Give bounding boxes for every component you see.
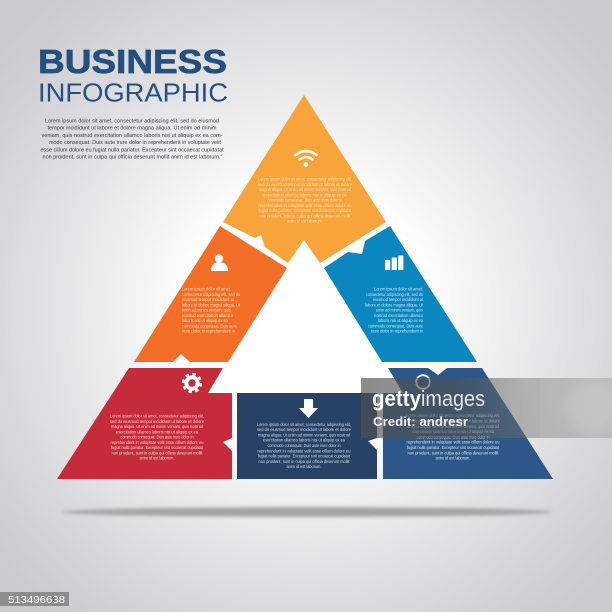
red panel text bbox=[110, 414, 205, 460]
right panel text: eiusmod tempor incididunt ut bbox=[373, 297, 424, 302]
intro text block: non proident, sunt in culpa qui officia deserunt mollit anim id est laborum." bbox=[42, 154, 223, 160]
navy panel text: non proident, sunt in culpa qui officia deserunt mollit bbox=[258, 459, 350, 464]
watermark: getty images credit bbox=[372, 386, 485, 429]
right blue panel text: commodo consequat. Duis aute irure dolor in bbox=[416, 434, 490, 439]
red panel text: sed do eiusmod tempor incididunt ut labore et dolore bbox=[110, 419, 205, 424]
red panel text: Lorem ipsum dolor sit amet, consectetur adipiscing elit, bbox=[110, 414, 204, 418]
panel: bottom-middle navy segment bbox=[237, 393, 377, 479]
red panel text: fugiat nulla pariatur. Excepteur sint occaecat cupidatat bbox=[111, 445, 204, 450]
icon: down arrow bbox=[299, 399, 318, 418]
red panel text: commodo consequat. Duis aute irure dolor in bbox=[120, 434, 194, 440]
left panel text: commodo consequat. Duis aute bbox=[182, 323, 238, 328]
left panel text: eiusmod tempor incididunt ut bbox=[182, 297, 235, 302]
panel: bottom-right blue segment bbox=[383, 368, 553, 479]
right blue panel text: reprehenderit in voluptate velit esse cillum dolore eu bbox=[406, 440, 500, 445]
orange panel text: magna aliqua. Ut enim ad minim veniam, quis nostrud bbox=[259, 187, 352, 192]
title: Business Infographic: BUSINESS bbox=[38, 44, 227, 81]
icon: bar chart bbox=[385, 256, 403, 270]
right panel text: laboris nisi ut aliquip ex ea bbox=[378, 318, 424, 323]
navy panel text: Lorem ipsum dolor sit amet, consectetur adipiscing elit, bbox=[257, 422, 351, 427]
panel: bottom-left red segment bbox=[57, 368, 232, 479]
right blue panel text: anim id est laborum. bbox=[436, 456, 470, 461]
image id tag bbox=[0, 592, 69, 606]
right blue panel text: non proident, sunt in culpa qui officia deserunt mollit bbox=[408, 450, 499, 455]
navy panel text: commodo consequat. Duis aute irure dolor in bbox=[268, 443, 341, 448]
icon: magnifier ring bbox=[416, 375, 430, 389]
icon: gear bbox=[183, 374, 201, 392]
right panel text: nostrud exercitation ullamco bbox=[374, 313, 424, 318]
right panel text: irure dolor in reprehenderit in bbox=[371, 328, 424, 334]
watermark: getty images credit: images bbox=[421, 386, 485, 411]
floor shadow bbox=[62, 507, 552, 517]
orange panel text: commodo consequat. Duis aute irure dolor in bbox=[268, 198, 343, 202]
left panel text: consectetur adipiscing elit, sed do bbox=[182, 292, 241, 297]
navy panel text: anim id est laborum. bbox=[286, 464, 322, 469]
image id tag: 513496638 bbox=[8, 594, 65, 606]
orange panel text: anim id est laborum. bbox=[287, 218, 323, 224]
orange panel text: fugiat nulla pariatur. Excepteur sint occaecat cupidatat bbox=[258, 208, 352, 213]
icon: wifi bbox=[296, 151, 316, 166]
orange panel text bbox=[258, 176, 353, 224]
orange panel text: reprehenderit in voluptate velit esse cillum dolore eu bbox=[258, 203, 352, 208]
right blue panel text: Lorem ipsum dolor sit amet, consectetur adipiscing elit, bbox=[406, 413, 500, 418]
icon: person bbox=[211, 254, 228, 271]
orange panel text: non proident, sunt in culpa qui officia deserunt mollit bbox=[260, 213, 351, 218]
orange panel text: sed do eiusmod tempor incididunt ut labore et dolore bbox=[258, 182, 353, 187]
left panel text: labore et dolore magna aliqua. Ut bbox=[182, 302, 241, 307]
left panel text: Lorem ipsum dolor sit amet, bbox=[182, 286, 231, 292]
left panel text: enim ad minim veniam, quis bbox=[182, 308, 231, 312]
intro text block bbox=[40, 118, 224, 160]
right blue panel text: magna aliqua. Ut enim ad minim veniam, quis nostrud bbox=[407, 424, 500, 429]
left panel text bbox=[182, 286, 241, 334]
navy panel text: reprehenderit in voluptate velit esse cillum dolore eu bbox=[258, 448, 351, 453]
right blue panel text: sed do eiusmod tempor incididunt ut labore et dolore bbox=[406, 418, 501, 424]
navy panel text: sed do eiusmod tempor incididunt ut labore et dolore bbox=[257, 427, 352, 432]
title: Business Infographic bbox=[38, 44, 228, 108]
red panel text: reprehenderit in voluptate velit esse cillum dolore eu bbox=[110, 440, 204, 445]
intro text block: tempor incididunt ut labore et dolore magna aliqua. Ut enim ad minim bbox=[48, 126, 216, 132]
right panel text: enim ad minim veniam, quis bbox=[376, 308, 423, 312]
left panel text: nostrud exercitation ullamco bbox=[182, 313, 234, 318]
red panel text: non proident, sunt in culpa qui officia deserunt mollit bbox=[112, 450, 203, 455]
red panel text: anim id est laborum. bbox=[140, 456, 174, 460]
watermark band bbox=[361, 378, 612, 438]
red panel text: magna aliqua. Ut enim ad minim veniam, quis nostrud bbox=[111, 424, 204, 429]
right panel text: consectetur adipiscing elit, sed do bbox=[366, 292, 424, 297]
panel: left orange-red segment bbox=[134, 226, 287, 362]
right panel text bbox=[365, 286, 424, 334]
intro text block: Lorem ipsum dolor sit amet, consectetur adipiscing elit, sed do eiusmod bbox=[45, 118, 219, 124]
watermark: getty images credit: Credit: andresr bbox=[373, 415, 468, 429]
right blue panel text: exercitation ullamco laboris nisi ut aliquip ex ea bbox=[412, 429, 495, 434]
navy panel text bbox=[257, 422, 352, 469]
intro text block: modo consequat. Duis aute irure dolor in reprehenderit in voluptate velit bbox=[49, 140, 222, 146]
orange panel text: exercitation ullamco laboris nisi ut aliquip ex ea bbox=[264, 192, 347, 197]
intro text block: veniam, quis nostrud exercitation ullamco laboris nisi ut aliquip ex ea com- bbox=[42, 133, 223, 139]
title: Business Infographic: INFOGRAPHIC bbox=[38, 78, 228, 108]
right blue panel text: fugiat nulla pariatur. Excepteur sint occaecat cupidatat bbox=[407, 445, 500, 450]
left panel text: laboris nisi ut aliquip ex ea bbox=[182, 318, 229, 323]
navy panel text: exercitation ullamco laboris nisi ut aliquip ex ea bbox=[263, 438, 346, 443]
right panel text: labore et dolore magna aliqua. Ut bbox=[365, 302, 424, 307]
left panel text: irure dolor in reprehenderit in bbox=[182, 328, 236, 334]
intro text block: esse cillum dolore eu fugiat nulla pariatur. Excepteur sint occaecat cupidatat bbox=[40, 147, 224, 153]
panel: top orange segment bbox=[223, 95, 386, 263]
panel: right blue segment bbox=[324, 226, 477, 362]
navy panel text: magna aliqua. Ut enim ad minim veniam, quis nostrud bbox=[258, 432, 351, 437]
right panel text: commodo consequat. Duis aute bbox=[368, 323, 424, 328]
red panel text: exercitation ullamco laboris nisi ut aliquip ex ea bbox=[116, 429, 199, 434]
orange panel text: Lorem ipsum dolor sit amet, consectetur adipiscing elit, bbox=[258, 176, 352, 182]
navy panel text: fugiat nulla pariatur. Excepteur sint occaecat cupidatat bbox=[258, 454, 351, 459]
right blue panel text bbox=[406, 413, 501, 461]
watermark: getty images credit: getty bbox=[372, 386, 422, 411]
right panel text: Lorem ipsum dolor sit amet, bbox=[374, 286, 423, 292]
